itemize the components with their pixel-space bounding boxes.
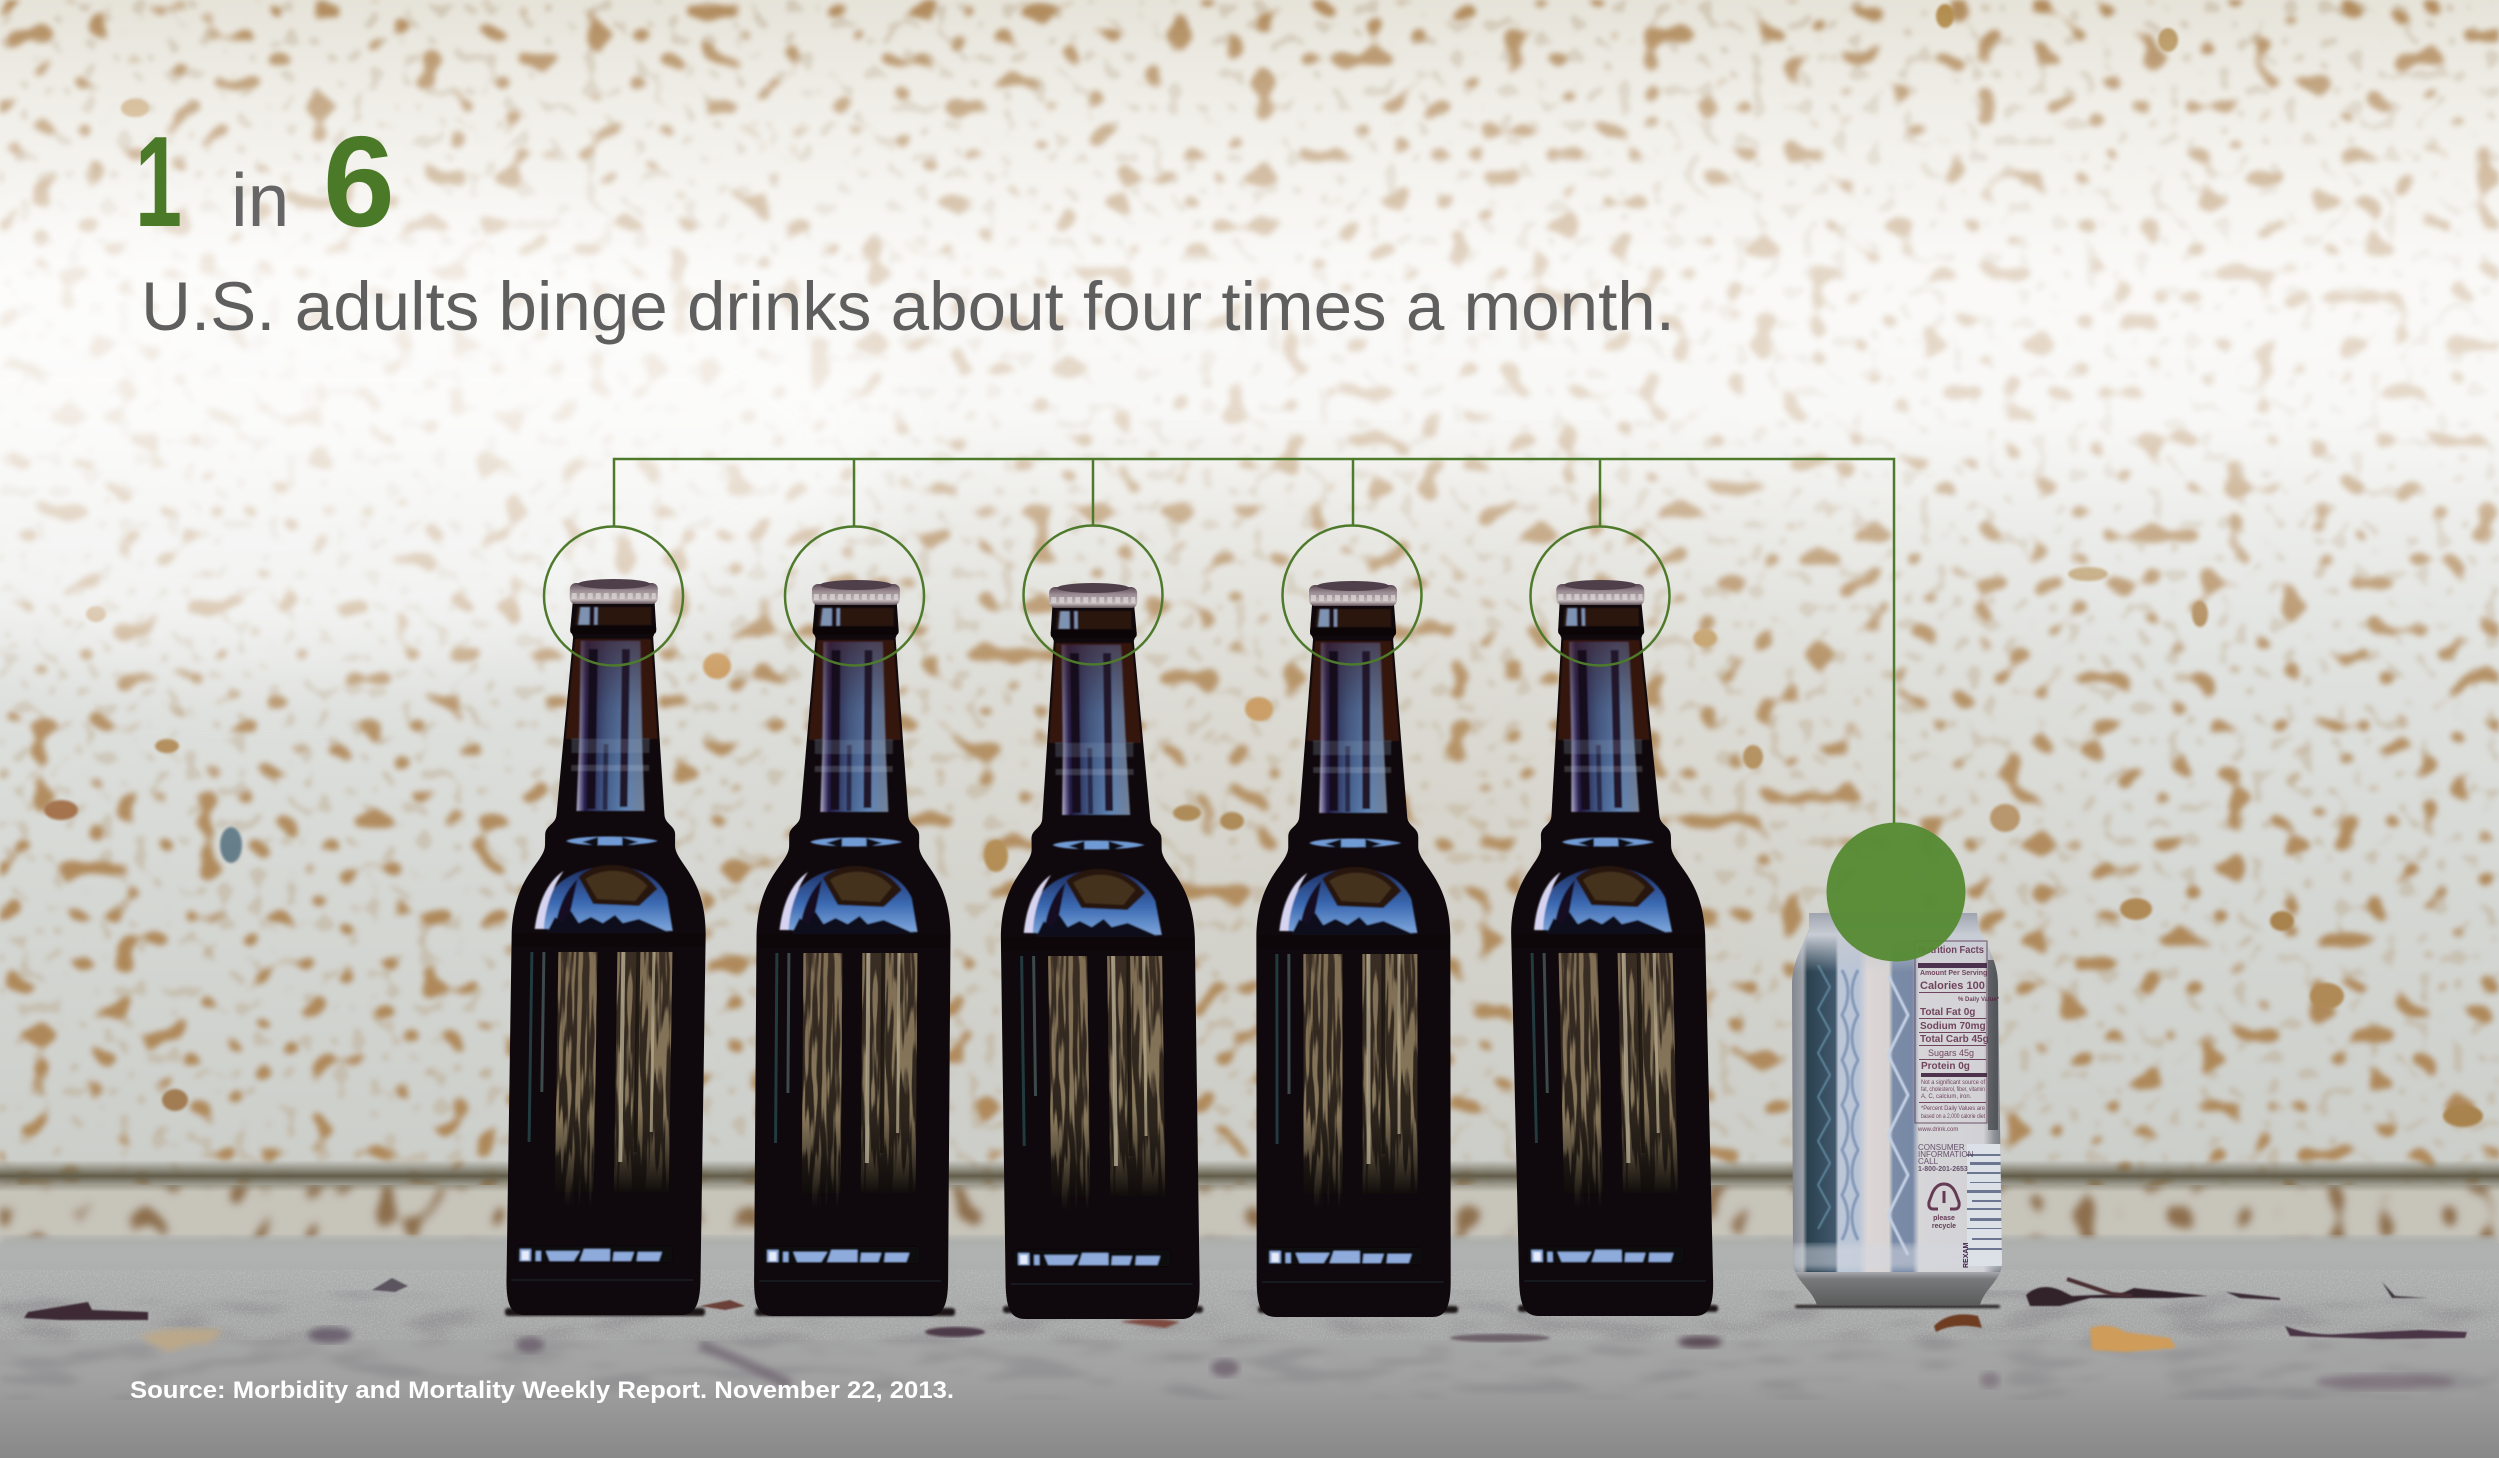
can nutrition label: Sugars 45g — [1928, 1048, 1974, 1058]
can nutrition label: based on a 2,000 calorie diet — [1921, 1114, 1985, 1120]
can nutrition label: Total Fat 0g — [1920, 1007, 1975, 1018]
can nutrition label: Total Carb 45g — [1920, 1034, 1989, 1045]
can nutrition label: Not a significant source of — [1921, 1080, 1985, 1086]
can nutrition label: CALL — [1918, 1157, 1939, 1166]
source note: Source: Morbidity and Mortality Weekly Report. November 22, 2013. — [130, 1377, 954, 1404]
filled green circle over the can — [1826, 822, 1966, 962]
title: 1 in 6: 1 — [135, 110, 182, 254]
bottle shadows on the floor — [505, 1305, 2000, 1316]
debris: leaves and twigs on the floor — [24, 1278, 2467, 1390]
background: concrete floor — [0, 1236, 2499, 1458]
subtitle: U.S. adults binge drinks about four times a month. — [141, 268, 1675, 345]
can nutrition label: Protein 0g — [1921, 1061, 1970, 1072]
can nutrition label: fat, cholesterol, fiber, vitamin — [1921, 1087, 1985, 1093]
bottle 5 — [1503, 580, 1714, 1316]
background: dark ledge groove and lower wall band — [0, 1160, 2499, 1247]
icon: recycle symbol on can: please — [1933, 1215, 1955, 1222]
title: 1 in 6 — [135, 110, 395, 254]
aluminium can: REXAM — [1963, 1243, 1970, 1268]
icon: recycle symbol on can — [1929, 1184, 1959, 1230]
can nutrition label: Sodium 70mg — [1920, 1021, 1986, 1032]
aluminium can — [1790, 910, 2005, 1310]
can nutrition label: Amount Per Serving — [1920, 970, 1987, 977]
icon: recycle symbol on can: recycle — [1932, 1223, 1956, 1230]
can nutrition label: 1-800-201-2653 — [1918, 1166, 1968, 1173]
can nutrition label: www.drink.com — [1917, 1127, 1958, 1133]
can nutrition label: *Percent Daily Values are — [1921, 1106, 1986, 1112]
title: 1 in 6: 6 — [323, 110, 395, 254]
can nutrition label: INFORMATION — [1918, 1150, 1974, 1159]
can nutrition label — [1915, 941, 2000, 1173]
can nutrition label: A, C, calcium, iron. — [1921, 1094, 1972, 1100]
title: 1 in 6: in — [231, 158, 289, 242]
bottle 2 — [754, 580, 953, 1316]
bottle 4 — [1256, 581, 1451, 1317]
can nutrition label: Nutrition Facts — [1918, 945, 1984, 956]
bottle 3 — [996, 583, 1200, 1319]
outline circles around bottle necks — [544, 526, 1670, 666]
can nutrition label: % Daily Value* — [1958, 997, 2000, 1003]
can nutrition label: Calories 100 — [1920, 980, 1985, 992]
bottle 1 — [506, 579, 711, 1315]
connector lines from drink circles to the green circle — [614, 459, 1894, 824]
can nutrition label: CONSUMER — [1918, 1143, 1965, 1152]
